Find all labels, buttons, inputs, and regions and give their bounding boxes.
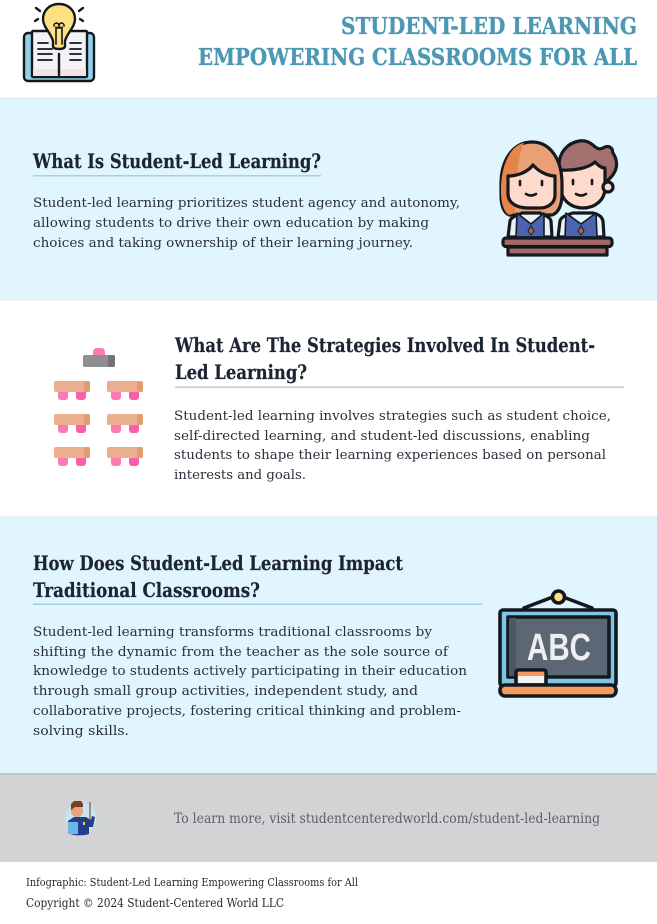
label: ABC on chalkboard: ABC	[527, 627, 591, 669]
icon: classroom seating plan	[54, 348, 143, 466]
icon: two students at desk	[501, 141, 617, 255]
footer	[0, 861, 657, 924]
text block: what is: Student-led learning prioritizes student agency and autonomy,	[33, 196, 460, 211]
text block: impact: collaborative projects, fostering critical thinking and problem-	[33, 704, 461, 719]
heading: impact	[33, 551, 482, 605]
copyright: Copyright © 2024 Student-Centered World LLC	[26, 896, 284, 910]
title	[198, 13, 637, 71]
call to action text: To learn more, visit studentcenteredworld.com/student-led-learning	[174, 811, 600, 827]
heading: strategies: Led Learning?	[175, 360, 307, 384]
panel: impact on traditional classrooms	[0, 516, 657, 773]
heading: impact: Traditional Classrooms?	[33, 578, 260, 602]
text block: what is: allowing students to drive their own education by making	[33, 216, 429, 231]
text block: strategies: self-directed learning, and student-led discussions, enabling	[174, 429, 590, 444]
text block: impact	[33, 625, 468, 739]
text block: impact: knowledge to students actively participating in their education	[33, 664, 468, 679]
text block: impact: solving skills.	[33, 724, 129, 739]
text block: strategies	[174, 409, 611, 483]
text block: what is: choices and taking ownership of their learning journey.	[33, 236, 413, 251]
icon: chalkboard ABC	[500, 591, 616, 696]
heading: impact: How Does Student-Led Learning Impact	[33, 551, 404, 575]
text block: what is	[33, 196, 460, 251]
text block: impact: shifting the dynamic from the teacher as the sole source of	[33, 645, 449, 660]
icon: light bulb over open book	[24, 4, 94, 81]
panel: header	[0, 0, 657, 98]
panel: learn more banner	[0, 773, 657, 861]
text block: impact: through small group activities, independent study, and	[33, 684, 418, 699]
text block: strategies: students to shape their learning experiences based on personal	[174, 448, 606, 463]
heading: strategies	[174, 333, 624, 388]
text block: strategies: Student-led learning involves strategies such as student choice,	[174, 409, 611, 424]
panel: what is student-led learning	[0, 98, 657, 300]
icon: teacher with pointer	[66, 801, 96, 835]
panel: strategies	[0, 300, 657, 517]
heading: what is: What Is Student-Led Learning?	[32, 149, 321, 173]
text block: strategies: interests and goals.	[174, 468, 306, 483]
credit line: Infographic: Student-Led Learning Empowering Classrooms for All	[26, 876, 358, 889]
text block: impact: Student-led learning transforms traditional classrooms by	[33, 625, 433, 640]
